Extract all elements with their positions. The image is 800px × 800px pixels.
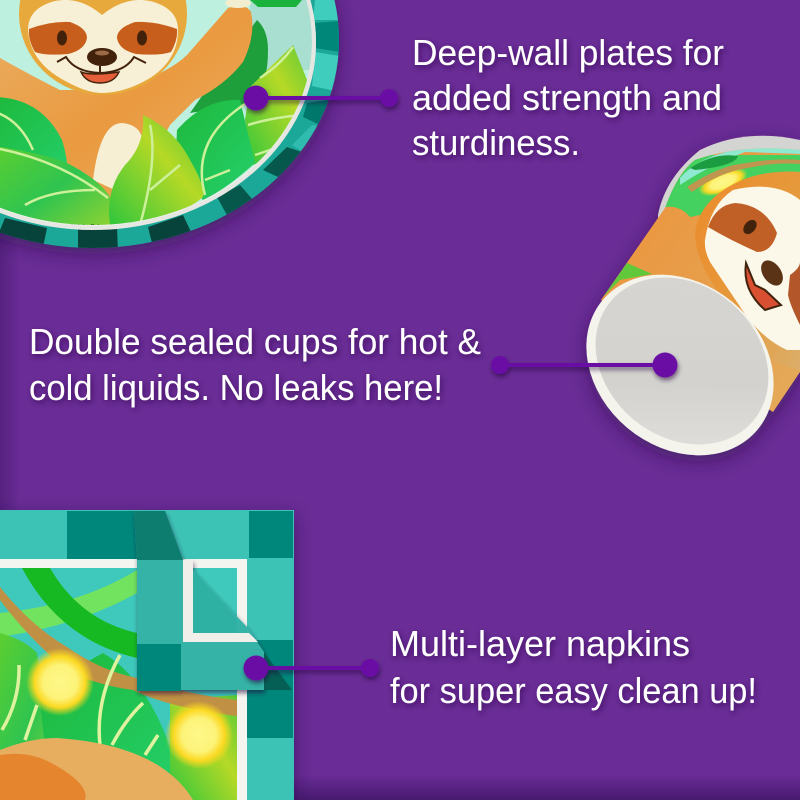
napkin: sloth design	[0, 510, 294, 800]
plate rim stripes	[0, 0, 340, 252]
cup rim	[658, 136, 800, 230]
cups text	[29, 321, 481, 408]
cup sloth face	[695, 172, 800, 370]
flower	[225, 0, 251, 8]
plate centre artwork	[0, 0, 312, 225]
cups connector	[491, 352, 678, 378]
plates text: Deep-wall plates for	[412, 32, 724, 73]
cup body	[601, 148, 800, 432]
callout: plates	[244, 32, 724, 163]
dark back leaf	[190, 20, 268, 113]
cups text: cold liquids. No leaks here!	[29, 367, 443, 408]
cups text: Double sealed cups for hot &	[29, 321, 481, 362]
napkin artwork	[0, 568, 237, 800]
plate: sloth design	[0, 0, 340, 252]
cup: sloth design	[578, 132, 800, 470]
napkins connector	[244, 656, 379, 680]
cup base	[550, 237, 800, 493]
copyright: ©BirthdayGalore.com	[66, 223, 119, 230]
napkin fold flap	[134, 511, 264, 691]
plates text	[412, 32, 724, 163]
plates connector	[244, 86, 398, 110]
napkins text: Multi-layer napkins	[390, 623, 690, 664]
sloth head	[19, 0, 187, 95]
plates text: added strength and	[412, 77, 722, 118]
napkins text	[390, 623, 757, 711]
plates text: sturdiness.	[412, 122, 580, 163]
callout: cups	[29, 321, 678, 408]
belly	[93, 123, 143, 190]
green bottle	[250, 0, 302, 7]
napkins text: for super easy clean up!	[390, 670, 757, 711]
callout: napkins	[244, 623, 757, 711]
napkin white border	[0, 559, 247, 800]
leaves	[0, 45, 307, 225]
sloth body and arm	[0, 6, 252, 200]
napkin border squares	[67, 511, 293, 738]
napkin fold shadow	[264, 652, 292, 690]
